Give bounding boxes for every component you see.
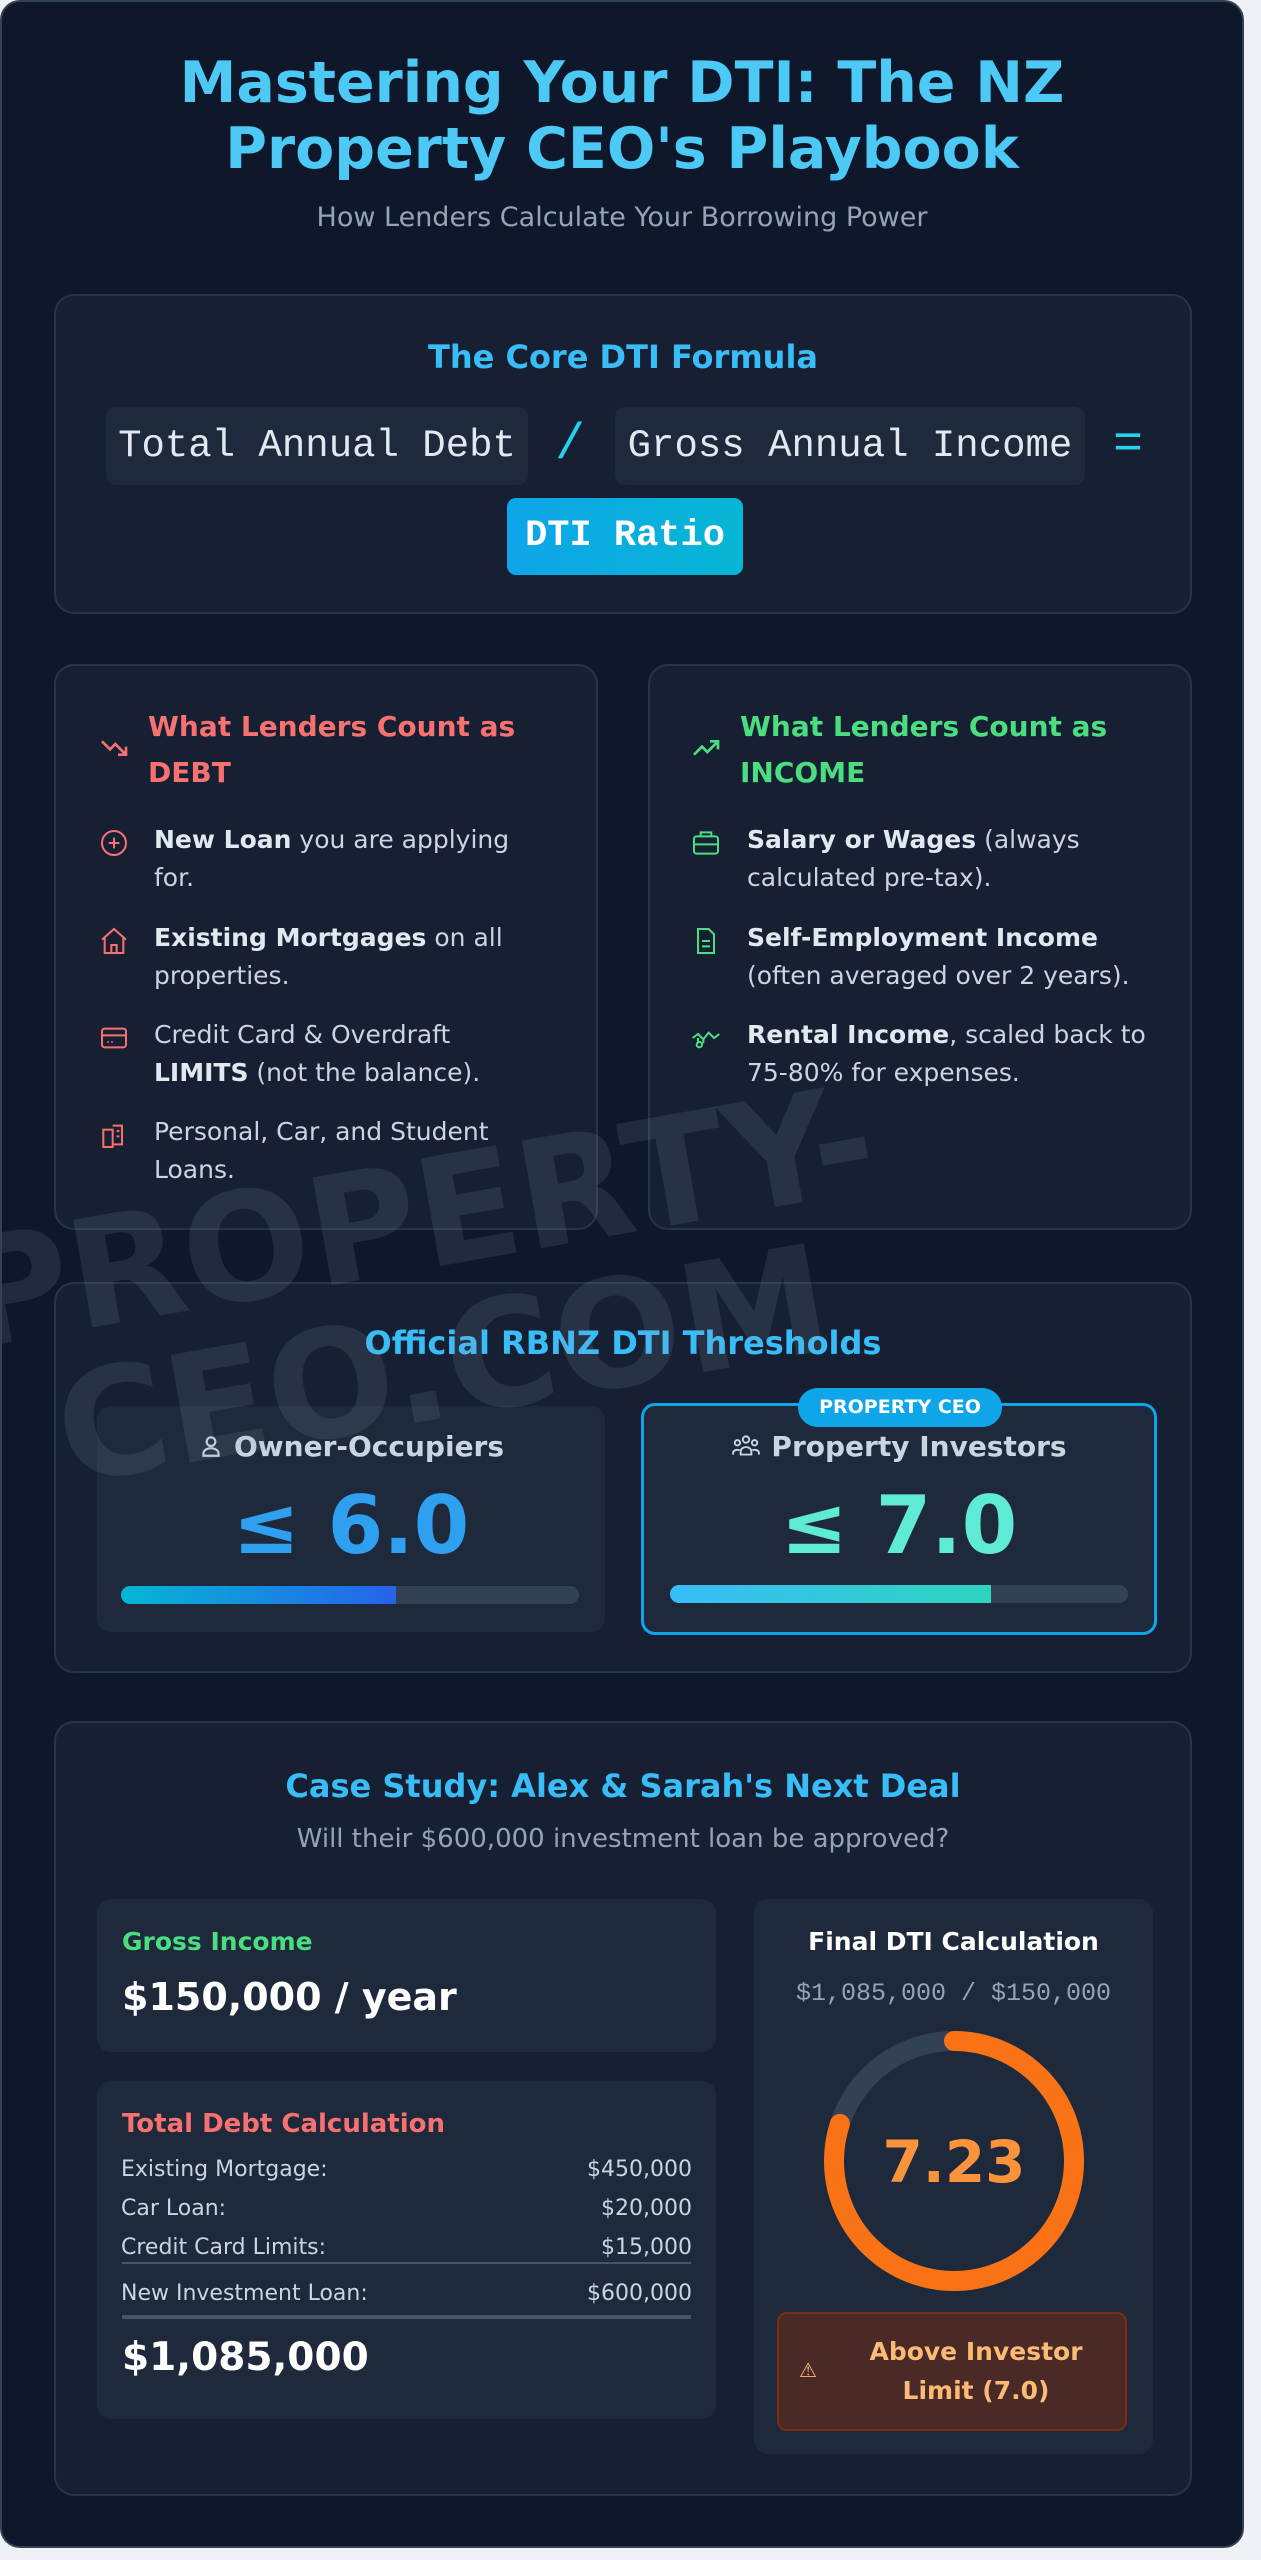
operator: equals: = (1113, 417, 1143, 474)
formula box: income: Gross Annual Income (628, 424, 1072, 468)
formula box: debt: Total Annual Debt (118, 424, 516, 468)
icon: handshake (692, 1031, 720, 1048)
label with icon: Property Investors (771, 1430, 1067, 1463)
card: final DTI (754, 1899, 1153, 2454)
value 6.0: ≤ 6.0 (233, 1479, 469, 1572)
formula heading: The Core DTI Formula (428, 338, 818, 376)
debt item: credit card: Credit Card & Overdraft LIMITS (not the balance). (154, 1020, 480, 1087)
operator: divide: / (555, 417, 585, 474)
card: gross income: $150,000 / year (122, 1975, 457, 2019)
card: total debt: $15,000 (601, 2235, 692, 2260)
card: total debt (97, 2081, 716, 2419)
card: total debt: Total Debt Calculation (122, 2109, 445, 2139)
card: total debt: Existing Mortgage: (121, 2157, 328, 2182)
bar 7.0 (670, 1585, 1128, 1603)
thresholds heading: Official RBNZ DTI Thresholds (365, 1324, 881, 1362)
card: final DTI: Final DTI Calculation (808, 1927, 1099, 1956)
panel: income (648, 664, 1192, 1230)
icon: plus circle (101, 830, 127, 856)
heading: income: What Lenders Count as INCOME (740, 710, 1107, 789)
debt item: personal loans: Personal, Car, and Student Loans. (154, 1117, 489, 1184)
gauge ring: 7.23 (882, 2128, 1026, 2196)
card: total debt: $1,085,000 (122, 2335, 369, 2380)
card: gross income: Gross Income (122, 1927, 313, 1956)
panel: core formula (54, 294, 1192, 614)
panel: debt (54, 664, 598, 1230)
heading: debt: What Lenders Count as DEBT (148, 710, 515, 789)
icon: trend down (101, 740, 128, 756)
watermark: CEO.COM (44, 1213, 843, 1519)
callout: above limit: Above Investor Limit (7.0) (869, 2337, 1083, 2405)
gauge ring (824, 2031, 1084, 2291)
icon: receipt (102, 1124, 123, 1148)
title: Mastering Your DTI: The NZ (180, 50, 1064, 116)
card: owner-occupiers (97, 1406, 605, 1632)
debt item: new loan: New Loan you are applying for. (154, 825, 509, 892)
card: total debt: $450,000 (587, 2157, 692, 2182)
income item: salary: Salary or Wages (always calculated pre-tax). (747, 825, 1080, 892)
callout: above limit (777, 2312, 1127, 2431)
card: total debt: Car Loan: (121, 2196, 226, 2221)
panel: thresholds (54, 1282, 1192, 1673)
case heading: Case Study: Alex & Sarah's Next Deal (285, 1767, 961, 1805)
card: total debt: $20,000 (601, 2196, 692, 2221)
card: final DTI: $1,085,000 / $150,000 (796, 1979, 1111, 2008)
bar 6.0 (121, 1586, 579, 1604)
debt item: mortgages: Existing Mortgages on all properties. (154, 923, 503, 990)
card: total debt: Credit Card Limits: (121, 2235, 326, 2260)
icon: house (101, 928, 127, 954)
callout: above limit: ⚠ (799, 2358, 817, 2382)
formula box: debt (106, 407, 528, 485)
card: total debt: $600,000 (587, 2281, 692, 2306)
badge: property ceo (798, 1388, 1002, 1427)
value 7.0: ≤ 7.0 (781, 1479, 1017, 1572)
income item: self-employment: Self-Employment Income (often averaged over 2 years). (747, 923, 1130, 990)
panel: case study (54, 1721, 1192, 2496)
case subtitle: Will their $600,000 investment loan be approved? (297, 1824, 949, 1854)
title (180, 50, 1064, 182)
card: investors (641, 1403, 1157, 1635)
title: Property CEO's Playbook (225, 116, 1019, 182)
icon: document (697, 928, 715, 954)
icon: trend up (693, 740, 720, 756)
income item: rental: Rental Income, scaled back to 75-80% for expenses. (747, 1020, 1146, 1087)
formula box: income (615, 407, 1085, 485)
icon: briefcase (693, 831, 719, 855)
card: gross income (97, 1899, 716, 2052)
result: DTI ratio (507, 498, 743, 575)
label with icon: Owner-Occupiers (234, 1430, 504, 1463)
badge: property ceo: PROPERTY CEO (819, 1396, 981, 1418)
subtitle: How Lenders Calculate Your Borrowing Power (317, 202, 927, 233)
card: total debt: New Investment Loan: (121, 2281, 368, 2306)
icon: card (101, 1028, 127, 1048)
result: DTI ratio: DTI Ratio (525, 515, 725, 557)
